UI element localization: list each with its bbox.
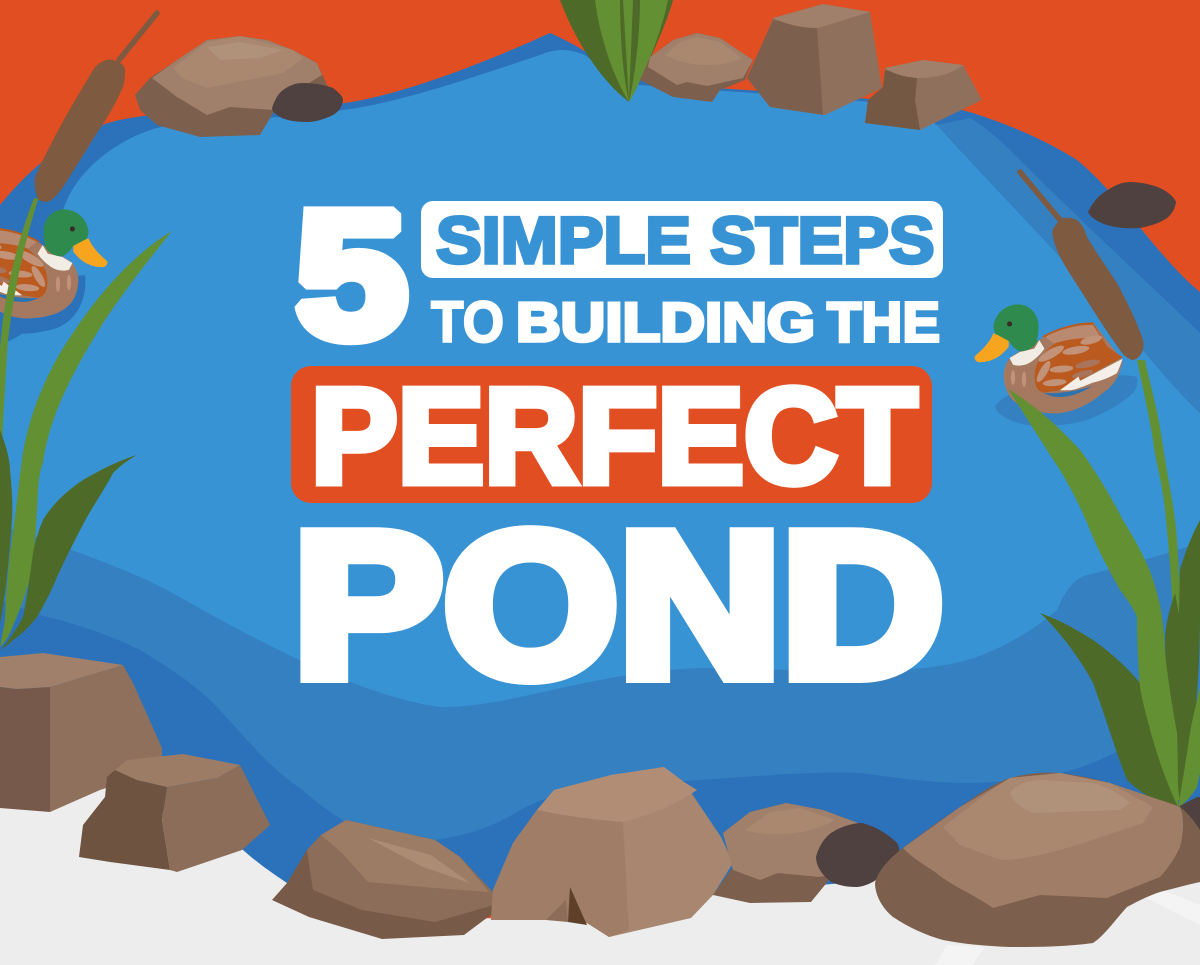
cattail: right — [1020, 172, 1184, 800]
leaf: large light — [0, 231, 172, 647]
numeral 5: 5 — [296, 174, 407, 374]
duck: left — [0, 209, 107, 318]
title — [291, 174, 944, 720]
ground: light streaks — [935, 885, 1200, 965]
rock: top small — [640, 33, 753, 102]
reed: top centre — [560, 0, 673, 102]
leaves: right — [1008, 389, 1200, 807]
leaf: right light — [1178, 687, 1200, 807]
pond: bottom dark band — [0, 600, 1200, 900]
rock: bottom left — [272, 820, 505, 939]
leaf: centre dark — [1165, 593, 1182, 807]
pebble: top left dark stone — [272, 83, 343, 122]
rock: lower left cube — [0, 653, 162, 812]
subheading — [431, 290, 940, 355]
subheading: BUILDING — [516, 291, 815, 353]
ground: pale bank — [0, 785, 1200, 965]
badge: perfect: PERFECT — [311, 360, 917, 512]
pebble: far right edge — [1178, 797, 1200, 830]
leaf: right dark — [1178, 520, 1200, 807]
subheading: TO — [431, 290, 504, 355]
rock: top right — [865, 60, 982, 130]
pond: main water — [0, 50, 1200, 800]
rock: top trapezoid — [747, 4, 882, 115]
duck shadow: right — [995, 375, 1137, 426]
heading: pond: POND — [293, 490, 944, 720]
rock: lower left small — [79, 754, 270, 872]
leaf: back dark — [0, 430, 12, 625]
rock: bottom centre large — [491, 767, 733, 937]
duck shadow: left — [0, 275, 85, 334]
pond: right shade band — [937, 118, 1200, 413]
pond: lower shade band — [0, 525, 1200, 900]
leaf: large light — [1008, 389, 1178, 807]
leaves: left — [0, 231, 172, 650]
leaf: dark left — [1040, 613, 1178, 807]
subheading: THE — [827, 290, 940, 354]
rock: top left — [135, 36, 328, 137]
pebble: bottom dark stone — [816, 823, 899, 887]
leaf: front dark — [0, 455, 137, 650]
rock: bottom right large — [875, 773, 1200, 947]
duck: right — [975, 304, 1123, 413]
badge: simple steps: SIMPLE STEPS — [436, 203, 934, 277]
rock: bottom centre small — [713, 803, 858, 903]
cattail: left — [0, 13, 157, 500]
pebble: right dark stone — [1088, 182, 1176, 228]
